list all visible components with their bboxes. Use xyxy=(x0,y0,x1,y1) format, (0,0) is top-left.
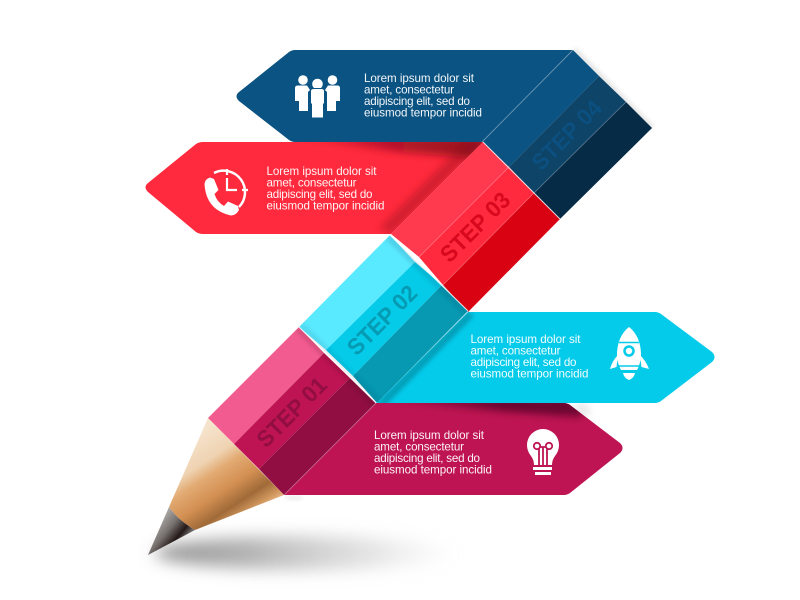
ground shadow xyxy=(155,536,455,570)
text: step 04 description: eiusmod tempor incidid xyxy=(364,106,482,120)
text: step 03 description: eiusmod tempor incidid xyxy=(266,200,384,212)
text: step 02 description: Lorem ipsum dolor sit xyxy=(470,333,581,346)
panel: step 01 banner xyxy=(284,398,622,495)
text: step 01 description: adipiscing elit, sed do xyxy=(374,452,480,465)
pencil segment: step 03 xyxy=(391,142,560,312)
text: step 04 description: Lorem ipsum dolor sit xyxy=(364,72,475,85)
edge shadows xyxy=(299,235,468,403)
panel: step 02 banner xyxy=(377,311,714,406)
text: step 01 description xyxy=(374,429,492,476)
wood cone xyxy=(169,418,284,530)
pencil segment: step 04 xyxy=(482,50,652,219)
label: STEP 03: STEP 03 xyxy=(435,187,515,267)
text: step 01 description: Lorem ipsum dolor sit xyxy=(374,429,485,442)
text: step 01 description: amet, consectetur xyxy=(374,440,464,454)
icon: rocket xyxy=(610,327,649,380)
icon: phone and clock xyxy=(204,169,248,216)
text: step 03 description: Lorem ipsum dolor sit xyxy=(266,165,377,178)
text: step 02 description xyxy=(470,333,588,380)
text: step 04 description: adipiscing elit, sed do xyxy=(364,95,470,108)
text: step 02 description: amet, consectetur xyxy=(470,344,561,358)
label: STEP 04: STEP 04 xyxy=(526,95,607,175)
shadow cast by blue banner xyxy=(322,142,482,234)
text: step 03 description xyxy=(266,165,384,212)
text: step 04 description xyxy=(364,72,482,120)
text: step 01 description: eiusmod tempor incidid xyxy=(374,464,492,476)
text: step 03 description: amet, consectetur xyxy=(266,176,357,190)
label: STEP 01: STEP 01 xyxy=(251,372,332,452)
text: step 02 description: adipiscing elit, sed do xyxy=(470,356,576,369)
soft shadows on white background xyxy=(284,48,654,500)
panel: step 03 banner xyxy=(146,136,490,234)
pencil segment: step 02 xyxy=(299,235,468,403)
segment highlight lines xyxy=(284,142,560,495)
panel: step 04 banner xyxy=(236,50,573,142)
text: step 03 description: adipiscing elit, sed do xyxy=(266,188,372,201)
label: STEP 02: STEP 02 xyxy=(342,280,422,360)
icon: people xyxy=(295,75,340,118)
icon: light bulb xyxy=(527,429,559,475)
text: step 04 description: amet, consectetur xyxy=(364,84,454,96)
edge shadow xyxy=(296,327,376,406)
graphite point xyxy=(148,507,195,555)
text: step 02 description: eiusmod tempor incidid xyxy=(470,368,588,380)
shadow cast by pencil xyxy=(377,311,474,406)
pencil infographic xyxy=(146,48,714,578)
pencil tip xyxy=(148,418,284,555)
pencil segment: step 01 xyxy=(208,327,376,495)
shadow cast by cyan banner xyxy=(406,403,585,422)
